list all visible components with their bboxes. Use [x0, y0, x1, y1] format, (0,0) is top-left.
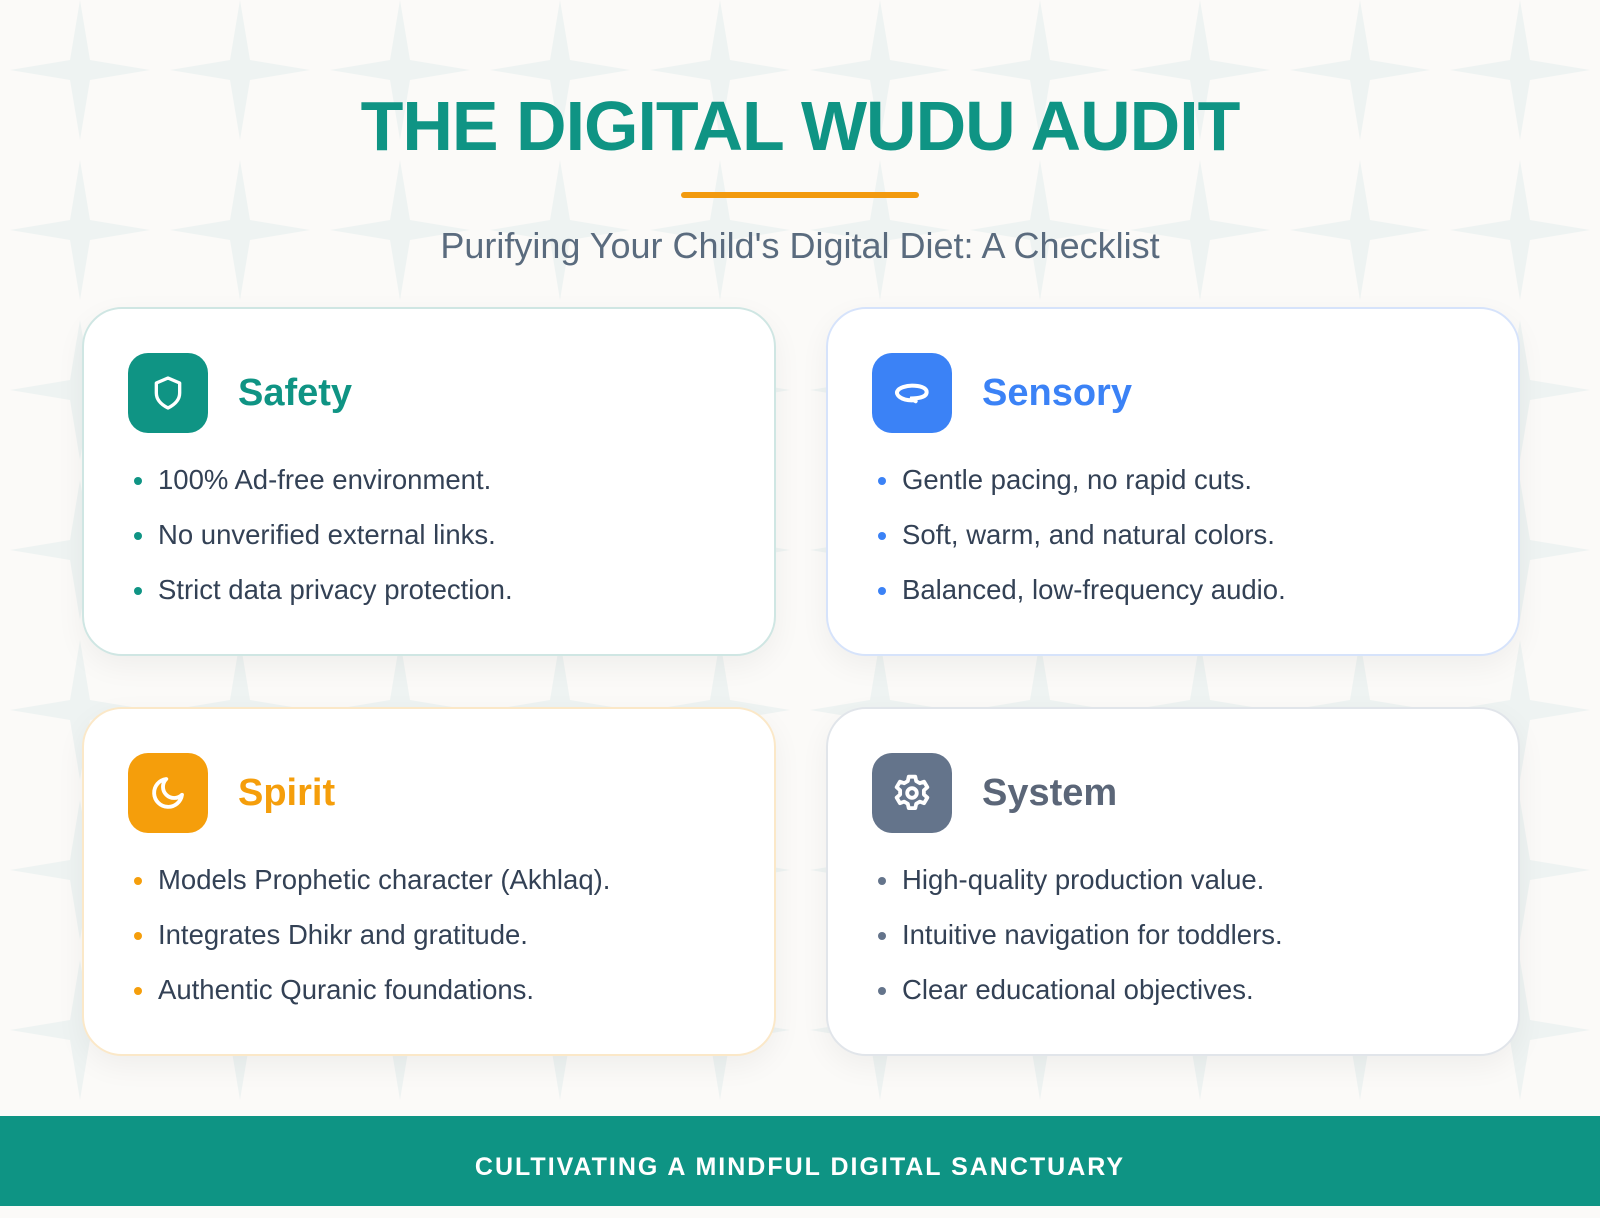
- heading: sensory: Sensory: [982, 372, 1132, 414]
- list: system: [878, 864, 1283, 1005]
- heading: system: System: [982, 772, 1117, 814]
- list: safety: Strict data privacy protection.: [158, 574, 513, 605]
- list: safety: 100% Ad-free environment.: [158, 464, 491, 495]
- icon: shield: [128, 353, 208, 433]
- heading: safety: Safety: [238, 372, 352, 414]
- list: safety: [134, 464, 513, 605]
- panel: safety: [82, 307, 776, 656]
- footer banner: CULTIVATING A MINDFUL DIGITAL SANCTUARY: [475, 1153, 1125, 1181]
- list: spirit: Integrates Dhikr and gratitude.: [158, 919, 528, 950]
- panel: sensory: [826, 307, 1520, 656]
- list: safety: No unverified external links.: [158, 519, 496, 550]
- list: system: High-quality production value.: [902, 864, 1264, 895]
- list: sensory: [878, 464, 1286, 605]
- list: system: Intuitive navigation for toddlers.: [902, 919, 1283, 950]
- list: spirit: Authentic Quranic foundations.: [158, 974, 534, 1005]
- list: sensory: Soft, warm, and natural colors.: [902, 519, 1275, 550]
- title: THE DIGITAL WUDU AUDIT: [361, 87, 1239, 165]
- icon: gear: [872, 753, 952, 833]
- list: sensory: Balanced, low-frequency audio.: [902, 574, 1286, 605]
- footer banner: [0, 1116, 1600, 1206]
- title underline: [681, 192, 919, 198]
- icon: moon: [128, 753, 208, 833]
- panel: system: [826, 707, 1520, 1056]
- list: spirit: Models Prophetic character (Akhlaq).: [158, 864, 610, 895]
- list: system: Clear educational objectives.: [902, 974, 1254, 1005]
- icon: eye: [872, 353, 952, 433]
- panel: spirit: [82, 707, 776, 1056]
- subtitle: Purifying Your Child's Digital Diet: A Checklist: [440, 225, 1160, 266]
- list: sensory: Gentle pacing, no rapid cuts.: [902, 464, 1252, 495]
- list: spirit: [134, 864, 610, 1005]
- heading: spirit: Spirit: [238, 772, 335, 814]
